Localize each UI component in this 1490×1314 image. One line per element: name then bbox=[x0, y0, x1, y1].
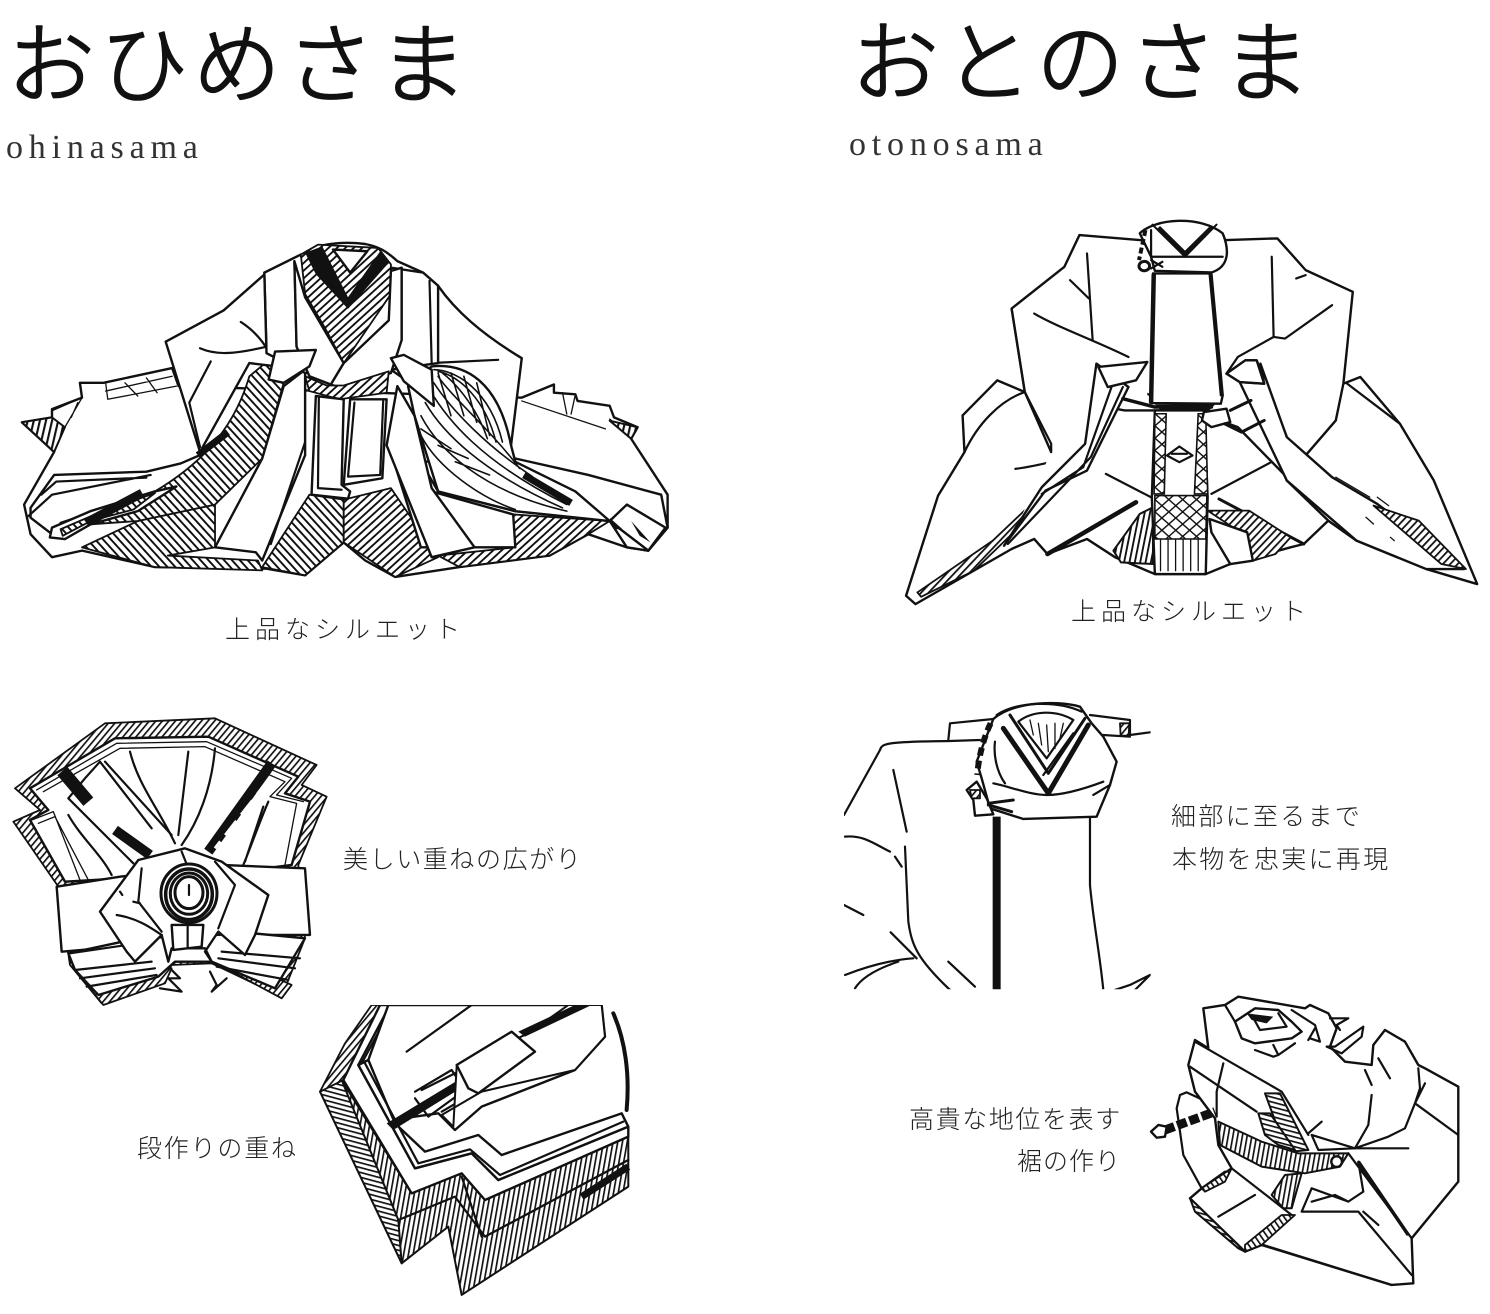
caption: noble status bbox=[909, 1106, 1122, 1176]
illustration: ohinasama full figure bbox=[22, 243, 668, 577]
caption: faithful detail: 本物を忠実に再現 bbox=[1172, 846, 1390, 874]
illustration: ohinasama back layers bbox=[13, 718, 327, 1005]
caption: noble status: 裾の作り bbox=[1017, 1148, 1121, 1176]
caption: faithful detail bbox=[1171, 803, 1390, 874]
caption: silhouette left: 上品なシルエット bbox=[225, 616, 465, 644]
title: ohimesama: おひめさま bbox=[7, 16, 472, 115]
caption: beautiful layered spread: 美しい重ねの広がり bbox=[343, 846, 582, 874]
caption: silhouette right: 上品なシルエット bbox=[1071, 598, 1311, 626]
illustration: otonosama back close-up bbox=[1151, 997, 1458, 1285]
caption: tiered layers: 段作りの重ね bbox=[137, 1135, 298, 1163]
illustration: otonosama collar close-up bbox=[844, 703, 1150, 990]
illustration: ohinasama layers close-up bbox=[320, 1005, 628, 1295]
romaji: ohinasama: ohinasama bbox=[6, 129, 204, 166]
caption: faithful detail: 細部に至るまで bbox=[1171, 803, 1362, 831]
illustration: otonosama full figure bbox=[906, 221, 1477, 604]
title: otonosama: おとのさま bbox=[851, 14, 1315, 113]
romaji: otonosama: otonosama bbox=[849, 126, 1049, 163]
caption: noble status: 高貴な地位を表す bbox=[909, 1106, 1122, 1134]
